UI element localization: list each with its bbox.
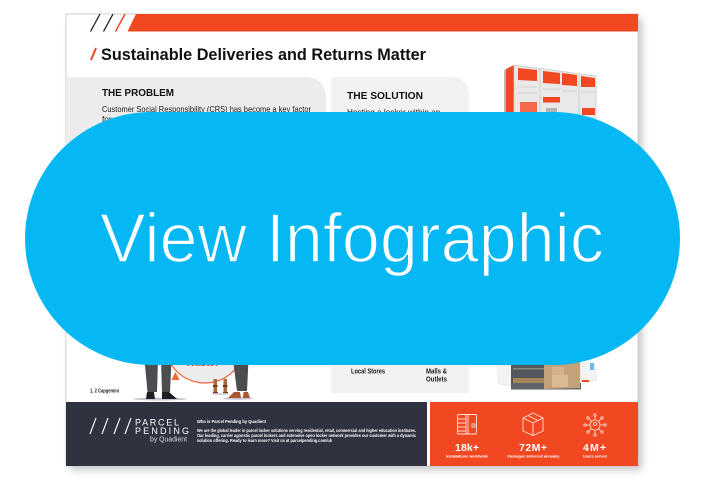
circle badge: Waste! (186, 358, 218, 369)
solution text: Hosting a locker within an (347, 108, 441, 117)
stat: users: Users served (583, 454, 608, 458)
solution heading: THE SOLUTION (347, 91, 423, 102)
label: malls and outlets: Outlets (426, 376, 447, 384)
stat: installations: 18k+ (455, 442, 479, 454)
problem heading: THE PROBLEM (102, 88, 174, 99)
logo: PARCEL (135, 418, 179, 428)
label: local stores: Local Stores (351, 368, 385, 376)
logo: PENDING (135, 426, 189, 436)
person left (133, 360, 187, 400)
icon: user network (584, 414, 606, 436)
stat: users (583, 414, 608, 458)
stat: packages: 72M+ (519, 442, 547, 454)
logo (90, 418, 189, 444)
label: malls and outlets (426, 368, 447, 384)
title: Sustainable Deliveries and Returns Matter (101, 46, 427, 64)
problem text: for (102, 115, 112, 124)
problem text: Customer Social Responsibility (CRS) has become a key factor (102, 105, 311, 114)
footer: stats panel (430, 402, 638, 466)
logo: by Quadient (150, 436, 187, 444)
problem text (102, 105, 311, 124)
button label: View Infographic (100, 199, 604, 277)
icon: locker (458, 414, 476, 434)
footnote: 1, 2 Capgemini (90, 388, 119, 394)
panel: the problem (66, 77, 326, 300)
icon: package (523, 413, 543, 436)
panel: the solution (331, 77, 469, 393)
page shadow (70, 18, 642, 470)
label: malls and outlets: Malls & (426, 368, 447, 376)
stat: installations (446, 414, 489, 458)
footer: about panel (66, 402, 427, 466)
about text: Our leading, carrier agnostic parcel lockers and extensive open locker network provides our customer with a dynamic (197, 433, 416, 438)
header band with slashes (90, 14, 638, 32)
about text (197, 419, 416, 443)
stat: users: 4M+ (583, 442, 606, 454)
about text: Who is Parcel Pending by Quadient (197, 419, 266, 424)
stat: packages (508, 413, 560, 458)
illustration: people and waste circle (133, 303, 253, 400)
stat: installations: Installations worldwide (446, 454, 489, 458)
locker illustration top (504, 65, 596, 118)
stat: packages: Packages delivered annually (508, 454, 560, 458)
about text: We are the global leader in parcel locker solutions serving residential, retail, commercial and higher education institutes. (197, 428, 416, 433)
infographic page (66, 14, 638, 466)
locker and parcels illustration bottom (497, 362, 597, 390)
about text: solution offering. Ready to learn more? Visit us at parcelpending.com/uk (197, 438, 332, 443)
person right (211, 360, 253, 400)
